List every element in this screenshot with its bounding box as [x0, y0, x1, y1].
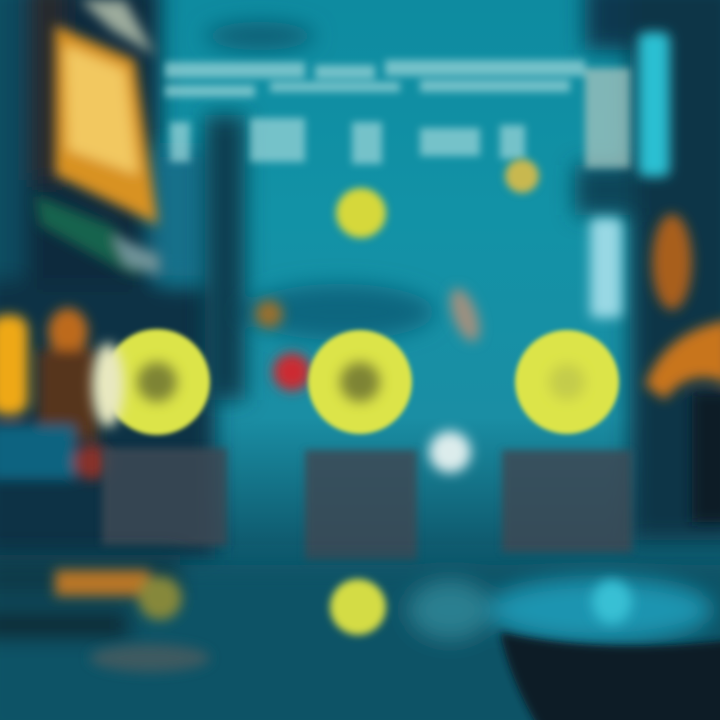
- left circle icon: [104, 329, 210, 435]
- centre panel: [305, 450, 417, 562]
- boat silhouette: [500, 632, 720, 720]
- street lights: [55, 570, 632, 672]
- heading blur: [165, 60, 630, 168]
- right lights: [590, 32, 720, 522]
- left building: [0, 0, 215, 560]
- right building: [575, 0, 720, 540]
- street: [0, 555, 720, 720]
- heading line 2: [165, 85, 255, 97]
- small accents: [255, 285, 486, 473]
- left circle glow: [92, 343, 124, 427]
- centre tower: [205, 22, 435, 400]
- heading line 3: [170, 122, 190, 162]
- right panel: [502, 450, 632, 553]
- text panels: [102, 448, 632, 562]
- left street lights: [0, 308, 110, 480]
- left panel: [102, 448, 227, 546]
- bottom yellow dot: [330, 579, 386, 635]
- top yellow dots: [336, 159, 539, 238]
- right circle icon: [515, 330, 619, 434]
- left window glow: [35, 0, 160, 275]
- heading line 1: [165, 62, 305, 78]
- centre circle icon: [308, 330, 412, 434]
